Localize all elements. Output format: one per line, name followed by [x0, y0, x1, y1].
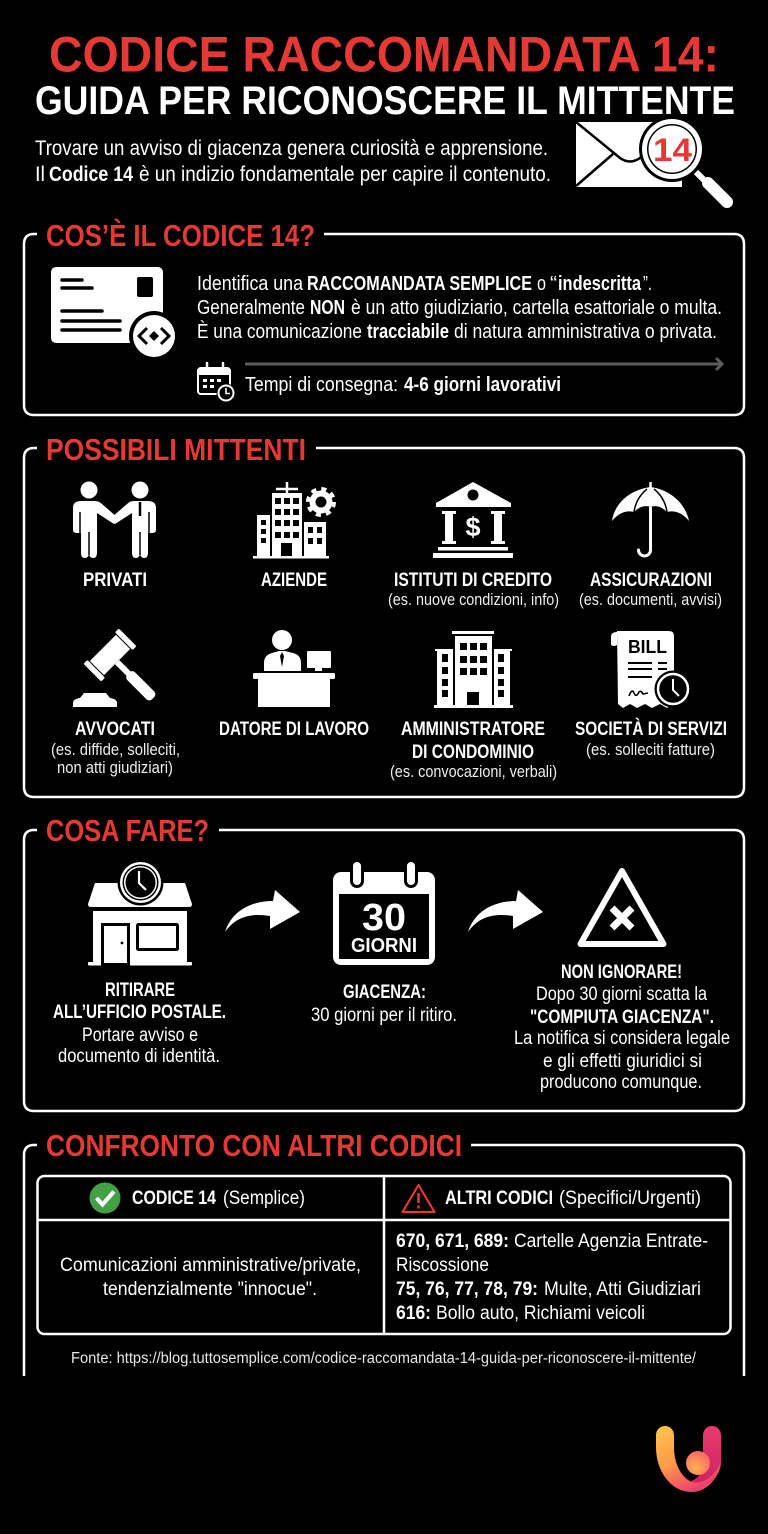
icon: green check	[90, 1182, 120, 1214]
label: avvocati	[51, 718, 180, 777]
heading: cos'è il codice 14: COS’È IL CODICE 14?	[46, 218, 315, 253]
description text: Generalmente	[197, 297, 305, 319]
arrow: delivery time	[245, 358, 722, 370]
text: ritirare: Portare avviso e	[82, 1025, 198, 1046]
label: datore di lavoro: DATORE DI LAVORO	[219, 718, 369, 740]
cell: altri codici list: Multe, Atti Giudiziari	[544, 1279, 701, 1300]
panel: cosa fare	[24, 813, 744, 1111]
icon: red warning triangle	[402, 1185, 434, 1212]
cell: altri codici list: 75, 76, 77, 78, 79:	[396, 1279, 538, 1300]
column header: altri codici: ALTRI CODICI	[445, 1188, 553, 1209]
description text: RACCOMANDATA SEMPLICE	[307, 273, 532, 295]
label: amministratore di condominio: AMMINISTRATORE	[401, 718, 545, 740]
cell: altri codici list	[396, 1231, 708, 1324]
description text: o	[537, 273, 546, 295]
icon: bill with clock	[611, 631, 692, 708]
description text: Identifica una	[197, 273, 304, 295]
label: assicurazioni: (es. documenti, avvisi)	[579, 591, 722, 609]
cell: altri codici list: Cartelle Agenzia Entrate-	[514, 1231, 708, 1252]
text: non ignorare: NON IGNORARE!	[561, 962, 682, 983]
column header: codice 14: (Semplice)	[223, 1188, 305, 1209]
text: non ignorare: Dopo 30 giorni scatta la	[536, 984, 707, 1005]
label: istituti di credito: (es. nuove condizioni, info)	[388, 591, 559, 609]
icon: envelope with magnifier: 14	[653, 132, 692, 168]
label: società di servizi: (es. solleciti fatture)	[586, 741, 715, 759]
column header: altri codici: (Specifici/Urgenti)	[559, 1188, 701, 1209]
intro text	[35, 137, 551, 186]
arrow: step 2 to step 3	[468, 890, 543, 932]
description text: NON	[310, 297, 345, 319]
intro text: Codice 14	[49, 163, 133, 186]
label: istituti di credito: ISTITUTI DI CREDITO	[394, 569, 552, 591]
column header: codice 14: CODICE 14	[132, 1188, 216, 1209]
source line: Fonte: https://blog.tuttosemplice.com/codice-raccomandata-14-guida-per-riconoscere-il-mittente/	[71, 1350, 697, 1367]
heading: possibili mittenti: POSSIBILI MITTENTI	[46, 432, 306, 467]
icon: post office	[88, 860, 192, 966]
label: aziende: AZIENDE	[261, 569, 327, 591]
icon: umbrella	[612, 482, 689, 556]
icon: calendar 30 giorni: GIORNI	[351, 935, 417, 957]
panel: cos'è il codice 14	[24, 218, 744, 415]
cell: altri codici list: 616:	[396, 1303, 431, 1324]
delivery time text: 4-6 giorni lavorativi	[404, 374, 561, 396]
text: non ignorare	[514, 962, 730, 1093]
label: istituti di credito	[388, 569, 559, 609]
label: società di servizi: SOCIETÀ DI SERVIZI	[575, 717, 727, 740]
icon: calendar with clock	[198, 363, 236, 402]
icon: company buildings and gear	[253, 482, 334, 558]
label: assicurazioni	[579, 569, 722, 609]
label: società di servizi	[575, 717, 727, 759]
column header: codice 14	[132, 1188, 305, 1209]
text: non ignorare: La notifica si considera legale	[514, 1028, 730, 1049]
description text: ”.	[643, 273, 652, 295]
text: non ignorare: "COMPIUTA GIACENZA".	[530, 1007, 714, 1028]
delivery time text: Tempi di consegna:	[245, 374, 398, 396]
cell: altri codici list: Bollo auto, Richiami veicoli	[436, 1303, 645, 1324]
arrow: step 1 to step 2	[225, 890, 300, 932]
panel: confronto con altri codici	[24, 1128, 744, 1376]
description text	[197, 273, 722, 343]
description text: tracciabile	[367, 321, 449, 343]
text: ritirare: documento di identità.	[58, 1046, 220, 1067]
icon: calendar 30 giorni: 30	[362, 897, 406, 939]
icon: bank	[433, 482, 513, 558]
delivery time text	[245, 374, 561, 396]
logo	[656, 1426, 721, 1492]
icon: condominium	[434, 631, 513, 708]
description text: indescritta	[558, 273, 642, 295]
text: giacenza	[311, 982, 457, 1026]
cell: altri codici list: 670, 671, 689:	[396, 1231, 509, 1252]
cell: codice 14 description: Comunicazioni amministrative/private,	[60, 1255, 361, 1276]
icon: calendar 30 giorni	[333, 866, 435, 965]
text: giacenza: 30 giorni per il ritiro.	[311, 1005, 457, 1026]
panel: possibili mittenti	[24, 432, 744, 797]
heading: confronto con altri codici: CONFRONTO CON ALTRI CODICI	[46, 1128, 462, 1163]
heading: cosa fare: COSA FARE?	[46, 813, 209, 848]
description text: È una comunicazione	[197, 320, 362, 343]
label: avvocati: (es. diffide, solleciti,	[51, 741, 180, 759]
cell: codice 14 description: tendenzialmente "innocue".	[103, 1279, 317, 1300]
intro text: Trovare un avviso di giacenza genera curiosità e apprensione.	[35, 137, 548, 160]
text: giacenza: GIACENZA:	[343, 982, 426, 1003]
icon: bank: $	[465, 512, 481, 542]
cell: codice 14 description	[60, 1255, 361, 1300]
description text: “	[550, 273, 557, 295]
intro text: è un indizio fondamentale per capire il contenuto.	[139, 163, 551, 186]
icon: postcard with badge	[51, 267, 179, 361]
column header: altri codici	[445, 1188, 701, 1209]
cell: altri codici list: Riscossione	[396, 1255, 489, 1276]
icon: employer at desk	[253, 630, 335, 707]
icon: bill with clock: BILL	[628, 637, 667, 657]
label: assicurazioni: ASSICURAZIONI	[590, 569, 712, 591]
intro text: Il	[35, 163, 45, 186]
label: amministratore di condominio: DI CONDOMINIO	[412, 741, 534, 763]
icon: handshake	[73, 482, 156, 558]
label: avvocati: non atti giudiziari)	[57, 759, 173, 777]
text: non ignorare: e gli effetti giuridici si	[543, 1051, 702, 1072]
label: avvocati: AVVOCATI	[75, 718, 155, 740]
text: ritirare: ALL’UFFICIO POSTALE.	[53, 1002, 226, 1023]
text: ritirare	[53, 980, 226, 1067]
title	[35, 26, 735, 123]
icon: warning triangle with x	[580, 871, 664, 944]
icon: envelope with magnifier	[576, 116, 727, 202]
description text: di natura amministrativa o privata.	[454, 321, 717, 343]
text: non ignorare: producono comunque.	[540, 1072, 702, 1093]
label: amministratore di condominio: (es. convocazioni, verbali)	[390, 763, 557, 781]
icon: gavel	[73, 628, 171, 716]
label: amministratore di condominio	[390, 718, 557, 781]
comparison table	[38, 1176, 730, 1334]
label: privati: PRIVATI	[83, 569, 147, 591]
title: CODICE RACCOMANDATA 14:	[49, 26, 719, 82]
description text: è un atto giudiziario, cartella esattoriale o multa.	[351, 297, 722, 319]
text: ritirare: RITIRARE	[105, 980, 175, 1001]
